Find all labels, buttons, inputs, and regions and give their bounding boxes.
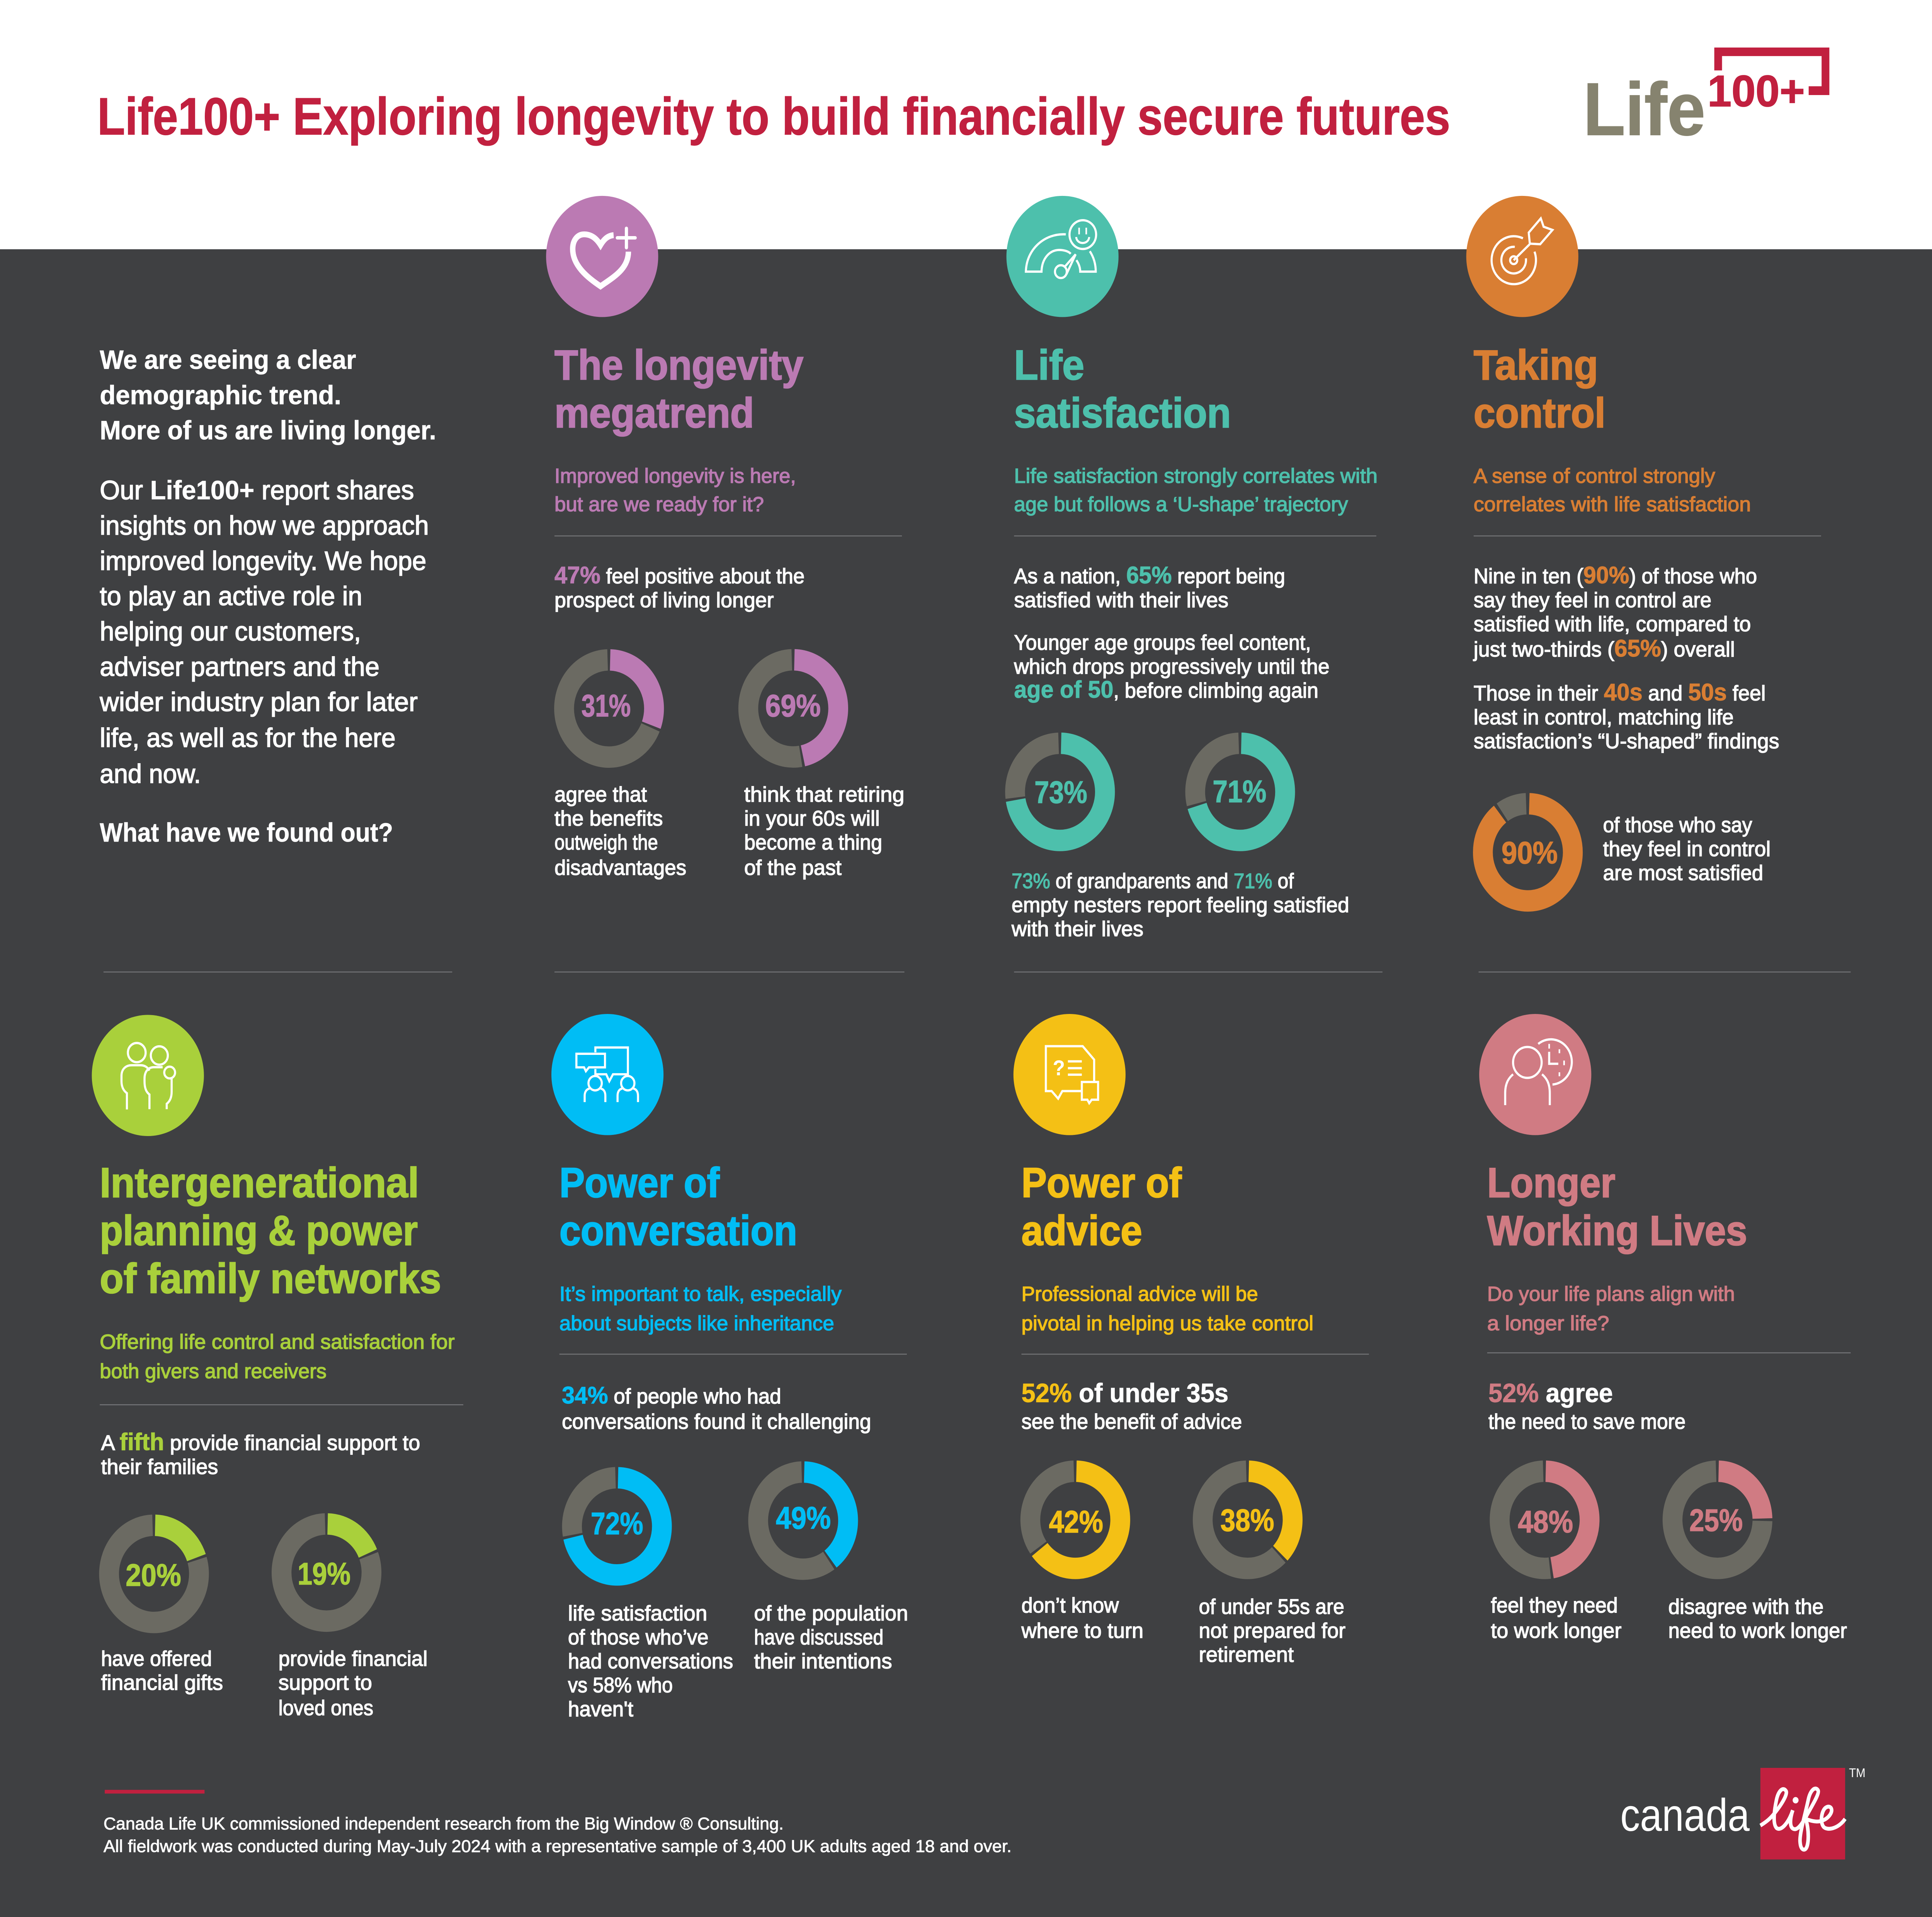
caption: 38%: retirement <box>1199 1643 1294 1667</box>
heading: satisfaction <box>1014 390 1231 437</box>
caption: 42% <box>1021 1594 1143 1643</box>
subheading: age but follows a ‘U-shape’ trajectory <box>1014 493 1348 516</box>
text: 40s and 50s: Those in their 40s and 50s feel <box>1474 679 1766 706</box>
statistic: 34%: 34% of people who had <box>562 1382 781 1408</box>
heading: Longer <box>1487 1160 1615 1206</box>
subheading: A sense of control strongly <box>1474 464 1715 487</box>
statistic: a fifth: A fifth provide financial support to <box>101 1428 420 1455</box>
statistic: 90% vs 65% <box>1473 561 1757 662</box>
subheading <box>560 1283 842 1335</box>
heading: conversation <box>560 1208 797 1254</box>
heading: megatrend <box>554 390 754 437</box>
donut chart: 69% <box>748 660 838 757</box>
donut chart: 48% <box>1500 1471 1590 1568</box>
panel: power of advice <box>1014 1014 1369 1667</box>
heading: Power of <box>1021 1160 1182 1206</box>
heading <box>1014 342 1231 437</box>
caption: 31%: agree that <box>554 783 647 806</box>
caption: 90% <box>1603 813 1770 885</box>
statistic: 65%: satisfied with their lives <box>1014 589 1228 612</box>
icon: two people talking <box>551 1014 663 1135</box>
caption: 90%: of those who say <box>1603 813 1752 837</box>
caption: grandparents and empty nesters: with their lives <box>1011 917 1143 941</box>
subheading: It’s important to talk, especially <box>560 1283 842 1305</box>
icon: heart plus <box>546 196 658 317</box>
subheading <box>1014 464 1378 516</box>
heading <box>1487 1160 1747 1254</box>
heading <box>1021 1160 1182 1254</box>
panel: intergenerational planning <box>92 1015 463 1720</box>
logo: canada life <box>1620 1766 1866 1859</box>
statistic: 52% agree: 52% agree <box>1488 1378 1613 1408</box>
logo: Life100+: 100+ <box>1708 67 1805 116</box>
subheading: but are we ready for it? <box>554 493 764 516</box>
icon: question speech bubble <box>1014 1014 1126 1135</box>
statistic: 52% agree <box>1488 1378 1685 1434</box>
caption: 25%: need to work longer <box>1668 1619 1847 1643</box>
heading: control <box>1474 390 1605 437</box>
heading: Intergenerational <box>100 1160 419 1206</box>
heading: Working Lives <box>1487 1208 1747 1254</box>
caption: 69%: think that retiring <box>744 783 905 806</box>
subheading: Offering life control and satisfaction for <box>100 1330 455 1353</box>
caption: 31%: outweigh the <box>554 831 658 854</box>
panel: power of conversation <box>551 1014 908 1721</box>
donut chart: 90%: 90% <box>1502 836 1558 870</box>
caption: 90%: they feel in control <box>1603 837 1770 861</box>
subheading: pivotal in helping us take control <box>1021 1312 1313 1335</box>
donut chart: 25%: 25% <box>1689 1503 1743 1538</box>
statistic: 34%: conversations found it challenging <box>562 1410 871 1434</box>
icon: target with arrow <box>1466 196 1578 317</box>
footnote: All fieldwork was conducted during May-July 2024 with a representative sample of 3,400 UK adults aged 18 and over. <box>104 1837 1012 1856</box>
subheading <box>1021 1283 1313 1335</box>
panel: the longevity megatrend <box>546 196 905 879</box>
heading: advice <box>1021 1208 1142 1254</box>
caption: 69% <box>744 783 905 879</box>
donut chart: 42% <box>1030 1471 1120 1568</box>
donut chart: 71% <box>1195 743 1285 840</box>
logo: Life100+ <box>1583 48 1829 151</box>
icon: person with clock <box>1479 1014 1591 1135</box>
subheading <box>554 464 796 516</box>
intro text block: life, as well as for the here <box>100 723 396 753</box>
subheading: both givers and receivers <box>100 1360 327 1383</box>
caption: 19%: provide financial <box>279 1647 428 1670</box>
panel: taking control <box>1466 196 1821 901</box>
caption: 25%: disagree with the <box>1668 1595 1823 1619</box>
caption: 90%: are most satisfied <box>1603 861 1763 885</box>
heading: Life <box>1014 342 1084 389</box>
panel: life satisfaction <box>1007 196 1378 941</box>
donut chart: 71%: 71% <box>1213 775 1266 809</box>
caption: 20%: financial gifts <box>101 1671 223 1694</box>
heading: of family networks <box>100 1255 441 1302</box>
caption: 38%: of under 55s are <box>1199 1595 1344 1619</box>
text: younger age groups: Younger age groups feel content, <box>1014 631 1311 655</box>
logo: canada life: canada <box>1620 1789 1750 1841</box>
intro text block: helping our customers, <box>100 617 361 646</box>
donut chart: 31%: 31% <box>582 689 631 723</box>
intro text block: to play an active role in <box>100 582 362 611</box>
intro text block: demographic trend. <box>100 381 341 410</box>
donut chart: 38%: 38% <box>1220 1503 1274 1538</box>
subheading <box>1474 464 1751 516</box>
caption: grandparents and empty nesters: empty nesters report feeling satisfied <box>1012 893 1349 917</box>
donut chart: 20%: 20% <box>126 1558 181 1593</box>
caption: 49%: of the population <box>754 1602 908 1625</box>
intro text block: insights on how we approach <box>100 511 429 541</box>
donut chart: 72% <box>572 1478 662 1575</box>
donut chart: 73%: 73% <box>1034 775 1087 810</box>
intro text block: adviser partners and the <box>100 652 379 682</box>
donut chart: 48%: 48% <box>1518 1505 1573 1539</box>
footnote <box>104 1814 1012 1856</box>
heading: planning & power <box>100 1208 418 1254</box>
intro text block: wider industry plan for later <box>99 687 418 717</box>
panel: longer working lives <box>1479 1014 1851 1643</box>
statistic: 65%: As a nation, 65% report being <box>1014 561 1285 589</box>
heading <box>100 1160 441 1302</box>
intro text block: What have we found out? <box>100 818 393 847</box>
caption: 31%: disadvantages <box>554 856 686 879</box>
statistic: 47% <box>554 561 804 612</box>
donut chart: 69%: 69% <box>765 689 821 723</box>
statistic: 52% of under 35s: 52% of under 35s <box>1021 1378 1228 1408</box>
caption: 19%: loved ones <box>279 1696 373 1720</box>
statistic: 90% vs 65%: satisfied with life, compared to <box>1474 612 1751 636</box>
caption: 72%: life satisfaction <box>568 1602 707 1625</box>
statistic: a fifth <box>101 1428 420 1479</box>
heading: Power of <box>560 1160 720 1206</box>
intro text block: We are seeing a clear <box>100 345 356 375</box>
caption: 49% <box>754 1602 908 1673</box>
donut chart: 49% <box>758 1472 848 1569</box>
text: younger age groups <box>1014 631 1330 703</box>
text: younger age groups: age of 50 , before climbing again <box>1014 676 1318 703</box>
caption: 49%: their intentions <box>754 1650 892 1673</box>
heading <box>560 1160 797 1254</box>
text: younger age groups: which drops progressively until the <box>1014 655 1330 679</box>
donut chart: 20% <box>109 1525 199 1623</box>
subheading: correlates with life satisfaction <box>1474 493 1751 516</box>
statistic: 47%: prospect of living longer <box>554 589 774 612</box>
donut chart: 25% <box>1672 1471 1762 1568</box>
subheading: Life satisfaction strongly correlates with <box>1014 464 1378 487</box>
caption: 42%: where to turn <box>1021 1619 1143 1643</box>
intro text block <box>99 345 436 847</box>
donut chart: 49%: 49% <box>776 1501 831 1535</box>
caption: 48% <box>1491 1594 1621 1643</box>
text: 40s and 50s: least in control, matching life <box>1474 706 1734 729</box>
caption: 31% <box>554 783 686 879</box>
donut chart: 42%: 42% <box>1049 1505 1103 1539</box>
statistic: 52% of under 35s: see the benefit of advice <box>1021 1410 1242 1434</box>
statistic: 90% vs 65%: Nine in ten ( 90%) of those who <box>1474 561 1757 589</box>
caption: 19%: support to <box>279 1671 372 1694</box>
caption: 20% <box>101 1647 223 1694</box>
caption: 20%: have offered <box>101 1647 212 1670</box>
statistic: a fifth: their families <box>101 1455 218 1479</box>
caption: 19% <box>279 1647 428 1720</box>
heading <box>554 342 803 437</box>
caption: 72%: of those who’ve <box>568 1626 709 1649</box>
caption: 31%: the benefits <box>554 807 663 830</box>
statistic: 65% <box>1014 561 1285 612</box>
caption: 69%: in your 60s will <box>744 807 880 830</box>
statistic: 52% agree: the need to save more <box>1488 1410 1685 1434</box>
caption: 72%: haven't <box>568 1698 633 1721</box>
subheading: Improved longevity is here, <box>554 464 796 487</box>
subheading: a longer life? <box>1487 1312 1609 1335</box>
donut chart: 72%: 72% <box>591 1507 643 1541</box>
statistic: 90% vs 65%: say they feel in control are <box>1474 589 1711 612</box>
caption: 69%: become a thing <box>744 831 882 854</box>
caption: grandparents and empty nesters: 73% of grandparents and 71% of <box>1012 869 1294 893</box>
intro text block: Our Life100+ report shares <box>100 476 414 505</box>
intro text block: More of us are living longer. <box>100 416 436 446</box>
intro text block: improved longevity. We hope <box>100 546 426 576</box>
caption: 25% <box>1668 1595 1847 1643</box>
statistic: 34% <box>562 1382 871 1434</box>
heading: Taking <box>1474 342 1598 389</box>
footnote: Canada Life UK commissioned independent research from the Big Window ® Consulting. <box>104 1814 784 1834</box>
intro text block: and now. <box>100 759 201 789</box>
caption: 38% <box>1199 1595 1345 1667</box>
title: Life100+ Exploring longevity to build financially secure futures <box>97 87 1450 146</box>
icon: family <box>92 1015 204 1136</box>
caption: 49%: have discussed <box>754 1626 883 1649</box>
text: 40s and 50s: satisfaction’s “U-shaped” findings <box>1474 730 1779 753</box>
donut chart: 19%: 19% <box>298 1557 350 1591</box>
statistic: 52% of under 35s <box>1021 1378 1242 1434</box>
donut chart: 73% <box>1015 743 1105 840</box>
heading <box>1474 342 1605 437</box>
donut chart: 90% <box>1483 804 1573 901</box>
donut chart: 31% <box>564 660 654 757</box>
text: 40s and 50s <box>1474 679 1779 753</box>
caption: 72%: had conversations <box>568 1650 733 1673</box>
subheading: about subjects like inheritance <box>560 1312 834 1335</box>
subheading <box>1487 1283 1735 1335</box>
caption: 72%: vs 58% who <box>568 1674 673 1697</box>
subheading: Professional advice will be <box>1021 1283 1258 1305</box>
caption: 69%: of the past <box>744 856 842 879</box>
statistic: 90% vs 65%: just two-thirds ( 65% ) overall <box>1473 635 1735 662</box>
caption: grandparents and empty nesters <box>1011 869 1349 941</box>
donut chart: 19% <box>282 1524 371 1621</box>
caption: 48%: feel they need <box>1491 1594 1618 1617</box>
caption: 48%: to work longer <box>1491 1619 1621 1643</box>
donut chart: 38% <box>1203 1471 1293 1568</box>
subheading: Do your life plans align with <box>1487 1283 1735 1305</box>
statistic: 47%: 47% feel positive about the <box>554 561 804 589</box>
icon: gauge with smiley <box>1007 196 1119 317</box>
logo: Life100+: Life <box>1583 68 1705 151</box>
logo: canada life: TM <box>1849 1766 1866 1780</box>
caption: 42%: don’t know <box>1021 1594 1119 1617</box>
caption: 72% <box>568 1602 733 1721</box>
icon: question speech bubble: ? <box>1053 1056 1065 1080</box>
subheading <box>100 1330 455 1383</box>
caption: 38%: not prepared for <box>1199 1619 1345 1643</box>
heading: The longevity <box>554 342 803 389</box>
